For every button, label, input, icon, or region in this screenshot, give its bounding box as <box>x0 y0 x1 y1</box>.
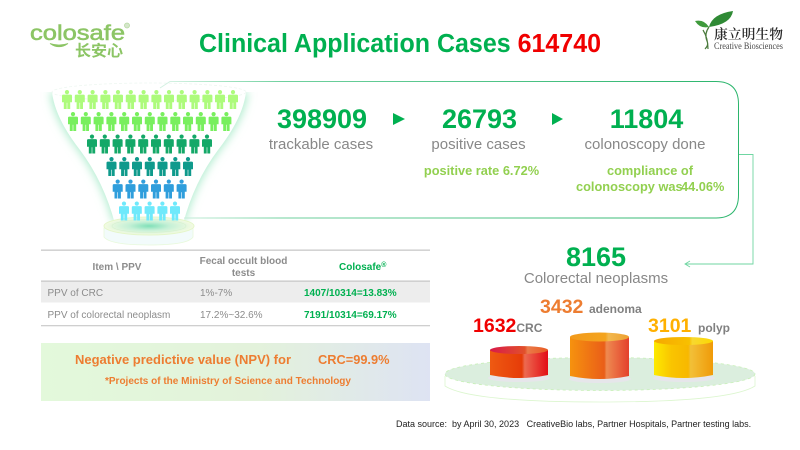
stat: positive cases <box>424 104 540 178</box>
table: PPV: 1407/10314=13.83% <box>304 288 397 299</box>
stat: colorectal neoplasms: Colorectal neoplasms <box>524 270 668 287</box>
people rows <box>62 90 238 220</box>
callout: NPV: *Projects of the Ministry of Science and Technology <box>105 376 351 387</box>
row 1 <box>62 90 238 109</box>
stat: positive cases: 26793 <box>442 104 517 134</box>
row 3 <box>87 134 212 154</box>
logo: colosafe: 长安心 <box>75 39 123 61</box>
funnel <box>50 83 248 245</box>
label: 3101 polyp: polyp <box>698 321 730 335</box>
row 2 <box>68 112 231 131</box>
table: PPV: PPV of colorectal neoplasm <box>48 310 170 321</box>
logo: colosafe <box>30 22 130 61</box>
stat: colonoscopy done: colonoscopy done <box>585 136 705 153</box>
stat: colonoscopy done: 11804 <box>610 104 683 134</box>
table: PPV: 1%-7% <box>200 288 232 299</box>
label: 3432 adenoma: 3432 <box>540 296 583 318</box>
title: Clinical Application Cases 614740 <box>199 30 601 58</box>
stat: colonoscopy done <box>576 104 725 194</box>
stat: colonoscopy done: 44.06% <box>681 179 725 194</box>
stat: colorectal neoplasms <box>524 242 668 287</box>
callout: NPV: Negative predictive value (NPV) for <box>75 352 291 367</box>
logo: Creative Biosciences: Creative Biosciences <box>714 41 783 51</box>
stat: colonoscopy done: compliance of <box>607 163 694 178</box>
connector arrow <box>685 154 753 267</box>
logo: Creative Biosciences <box>695 11 783 51</box>
logo: colosafe: colosafe <box>30 22 125 45</box>
data source: Data source: by April 30, 2023 CreativeBio labs, Partner Hospitals, Partner testing labs. <box>396 419 751 429</box>
table: PPV: PPV of CRC <box>48 288 103 299</box>
logo: Creative Biosciences: 康立明生物 <box>714 23 783 43</box>
arrow 1 <box>393 113 405 125</box>
arrow 2 <box>552 113 563 125</box>
stat: positive cases: positive rate 6.72% <box>424 163 540 178</box>
table: PPV: 17.2%~32.6% <box>200 310 263 321</box>
row 6 <box>119 202 180 220</box>
stat: trackable cases <box>269 104 373 153</box>
stat: trackable cases: 398909 <box>277 104 367 134</box>
table: PPV: 7191/10314=69.17% <box>304 310 397 321</box>
stat: positive cases: positive cases <box>431 136 526 153</box>
label: 3432 adenoma: adenoma <box>589 302 642 316</box>
table: PPV: tests <box>232 268 256 279</box>
stat: trackable cases: trackable cases <box>269 136 373 153</box>
label: 1632 CRC: 1632CRC <box>473 315 543 337</box>
platform <box>445 358 755 402</box>
table: PPV: Colosafe <box>339 262 381 273</box>
callout: NPV: CRC=99.9% <box>318 352 390 367</box>
cylinder: adenoma <box>569 332 631 383</box>
label: 3101 polyp: 3101 <box>648 315 691 337</box>
table: PPV: Fecal occult blood <box>200 256 287 267</box>
callout: NPV <box>41 343 430 401</box>
cylinder: CRC <box>488 346 550 382</box>
table: PPV: Item \ PPV <box>93 262 142 273</box>
cylinder: polyp <box>653 337 715 382</box>
stat: colonoscopy done: colonoscopy was <box>576 179 683 194</box>
stat: colorectal neoplasms: 8165 <box>566 242 626 272</box>
row 5 <box>113 180 187 198</box>
row 4 <box>106 157 193 176</box>
table: PPV <box>41 250 430 326</box>
panel: case flow outline <box>160 82 738 218</box>
table: PPV: ® <box>381 261 387 269</box>
